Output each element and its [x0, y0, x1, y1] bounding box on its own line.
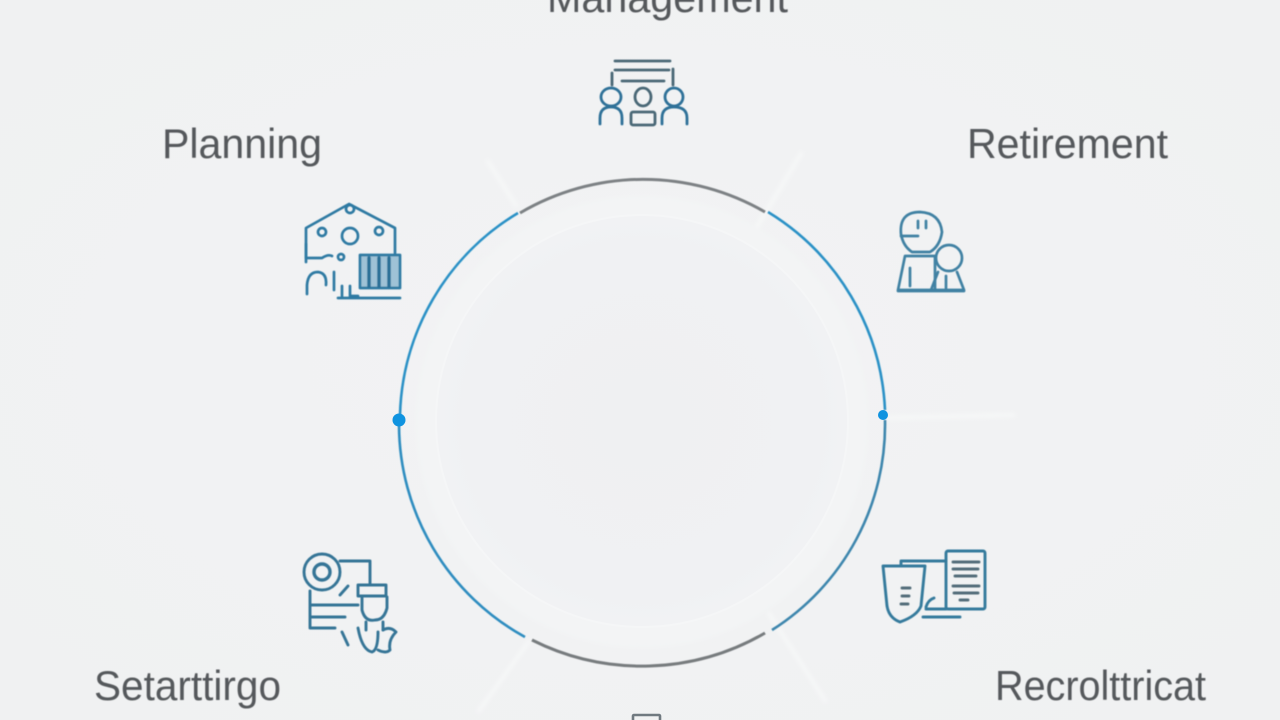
- icon: retirement couple: [898, 212, 964, 291]
- label: Setarttirgn: Setarttirgo: [94, 662, 281, 709]
- icon: starting worker: [304, 554, 396, 652]
- label: Planning: Planning: [162, 120, 322, 167]
- icon: management meeting: [600, 61, 687, 125]
- label: Recrolttricat: Recrolttricat: [995, 662, 1206, 709]
- node: left dot: [392, 414, 406, 426]
- icon: planning house: [306, 204, 400, 298]
- node: right dot: [878, 410, 888, 420]
- label: Retirement: Retirement: [967, 120, 1168, 167]
- ring: cycle diagram: [392, 179, 888, 666]
- icon: bottom partial icon: [633, 715, 660, 720]
- icon: recruitment documents: [883, 551, 985, 622]
